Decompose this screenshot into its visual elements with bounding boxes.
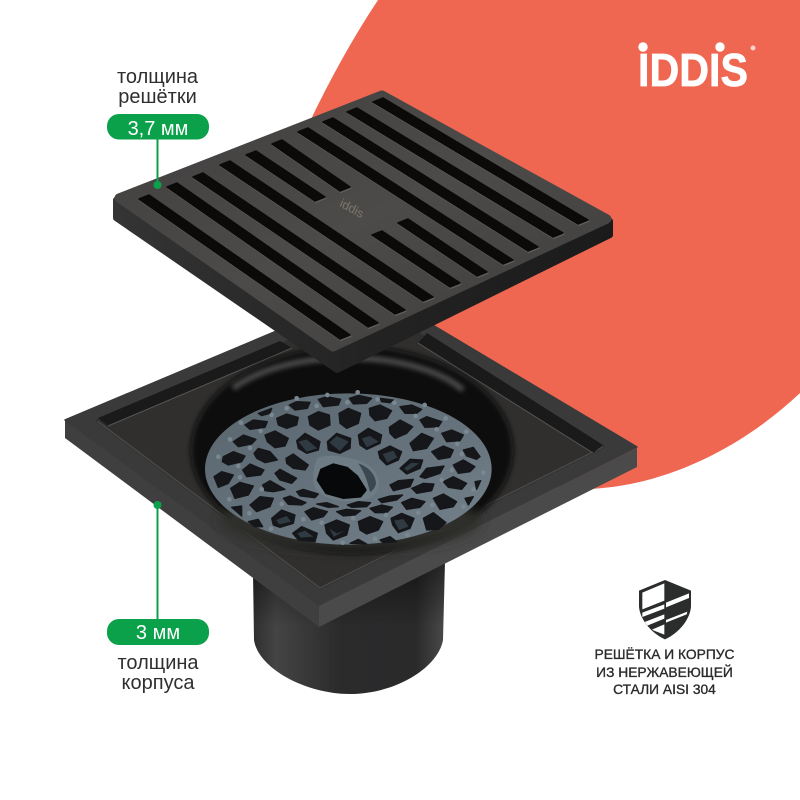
hub ring [313,456,379,501]
caption: material: ИЗ НЕРЖАВЕЮЩЕЙ [596,663,733,680]
slot highlights [140,99,589,340]
drain hole [318,465,365,497]
callout: grate thickness: 3,7 мм [128,118,188,140]
lit hole interiors [276,436,419,538]
pins [216,390,486,545]
red background shape [297,0,800,489]
engraved logo: iddis [338,196,366,221]
rim grooves [98,333,603,453]
caption: material [595,646,735,697]
bowl highlight [233,358,463,390]
bowl lit lower wall [220,490,480,550]
callout: grate thickness [107,66,209,189]
icon: shield [639,580,691,639]
slots [139,98,588,339]
callout: body thickness: толщина [117,652,199,674]
callout: body thickness: корпуса [122,672,195,694]
strainer holes [214,395,481,544]
frame recess [97,306,603,588]
grate top face [119,95,607,347]
drain body [65,290,637,694]
caption: material: РЕШЁТКА И КОРПУС [595,646,735,662]
strainer disk [205,390,492,545]
frame side walls [65,420,319,627]
logo: iddis: IDDIS [638,44,748,96]
callout: grate thickness: решётки [118,86,197,108]
caption: material: СТАЛИ AISI 304 [613,682,716,697]
drain grate [116,95,610,370]
frame top face [65,290,637,605]
grate side walls [116,200,610,370]
callout: body thickness: 3 мм [136,622,180,644]
pipe [253,560,445,694]
label: grate thickness: толщина [117,66,199,88]
callout: body thickness [107,501,209,694]
bowl [191,346,513,554]
